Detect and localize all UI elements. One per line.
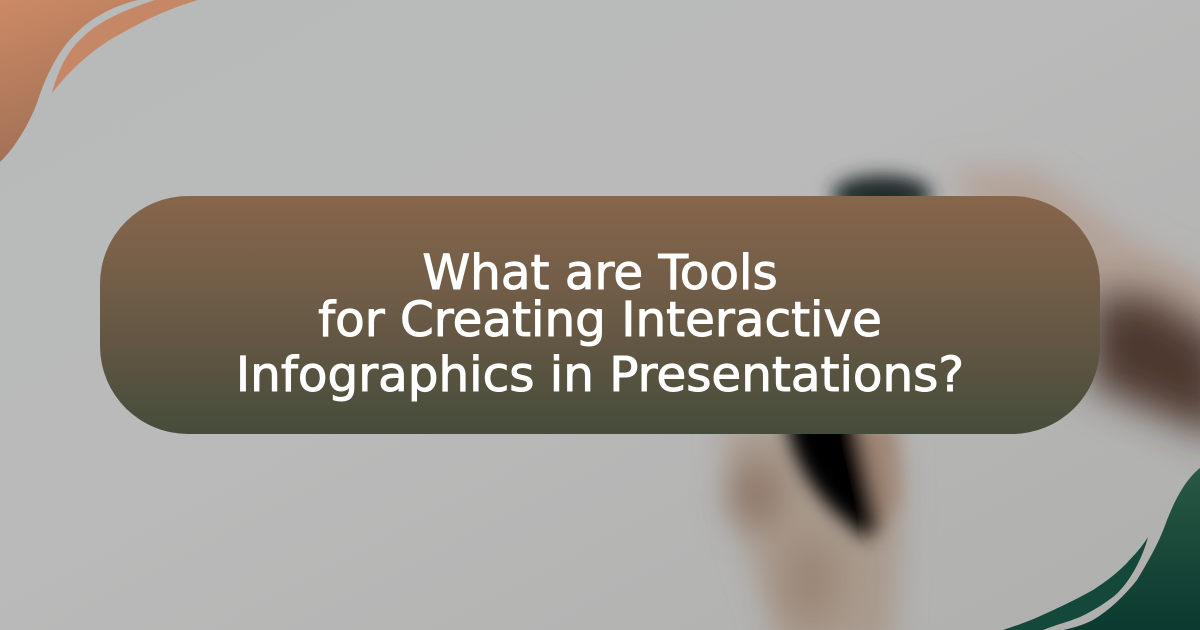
title: for Creating Interactive [318, 292, 882, 348]
title [236, 245, 964, 403]
decorative orange wave: top left [0, 0, 198, 162]
title: Infographics in Presentations? [236, 347, 964, 403]
title pill [100, 196, 1100, 434]
decorative green wave: bottom right [1003, 468, 1200, 630]
title: What are Tools [422, 245, 778, 301]
